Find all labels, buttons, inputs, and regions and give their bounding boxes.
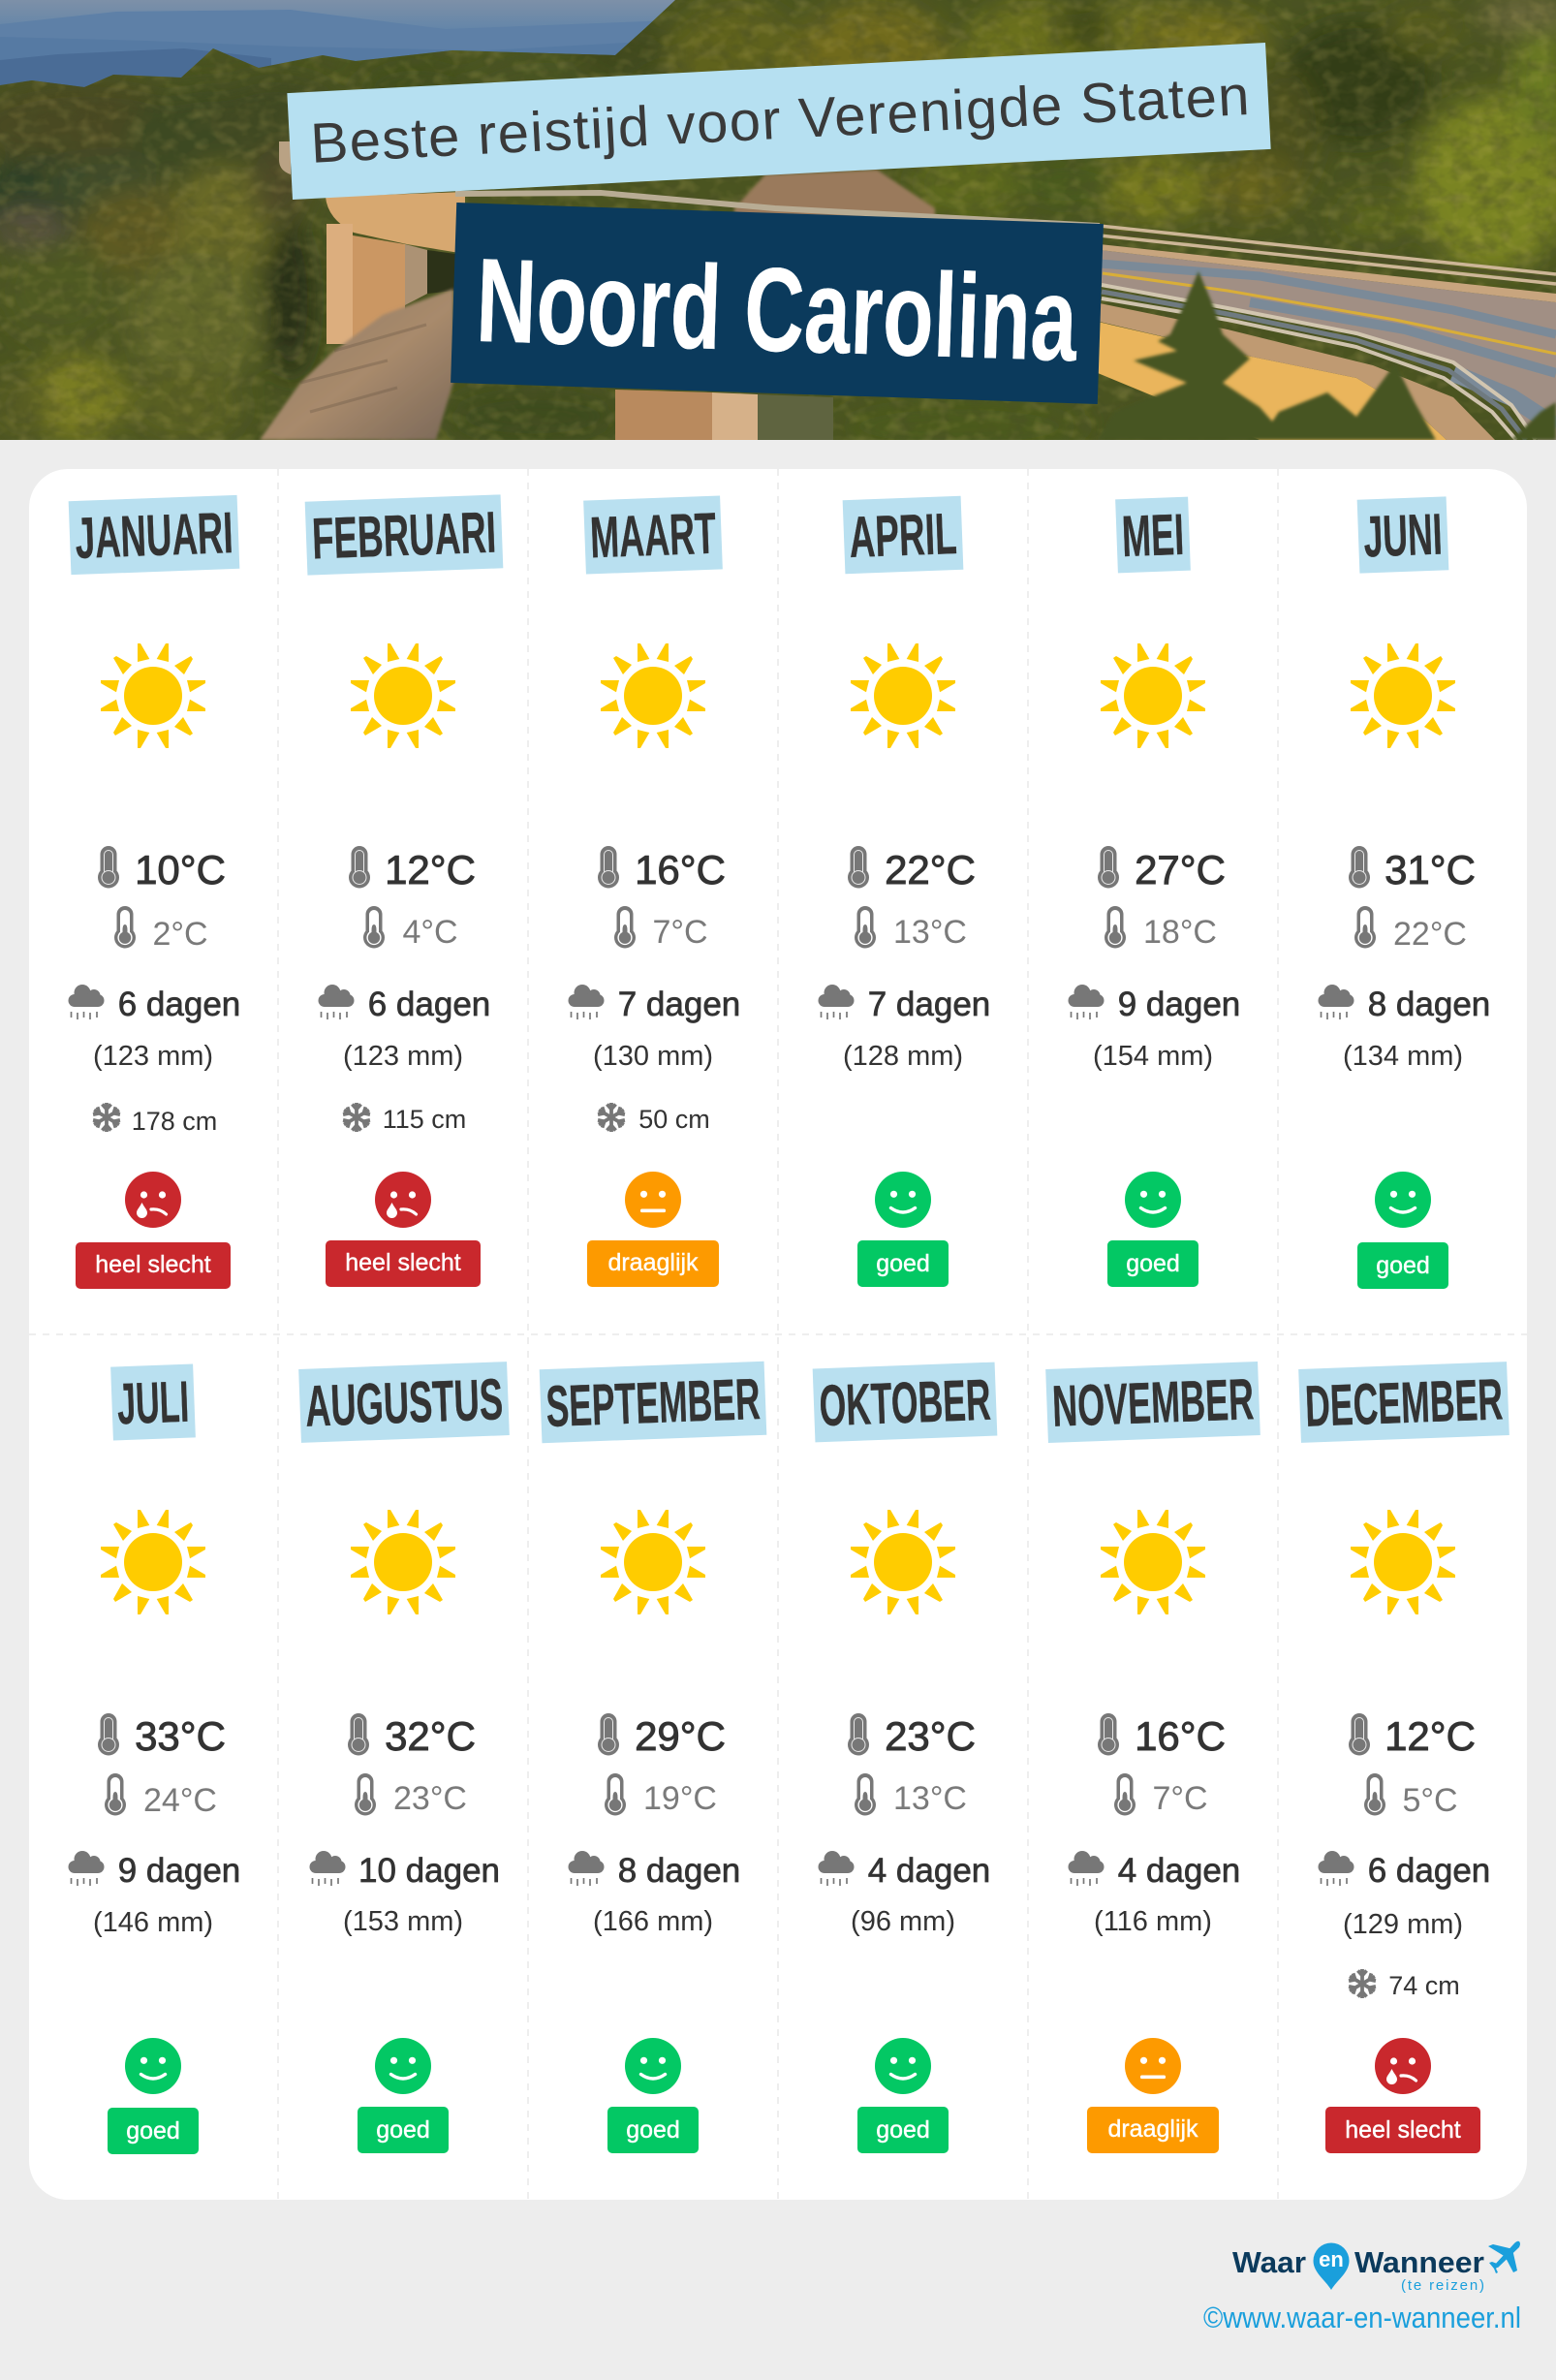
smiley <box>625 1172 681 1228</box>
rain days <box>568 1851 740 1890</box>
low temperature: 7°C <box>652 914 708 951</box>
low temperature <box>855 906 967 951</box>
smiley <box>875 2038 931 2094</box>
low temperature: 19°C <box>643 1780 717 1817</box>
rating badge <box>358 2107 449 2153</box>
low temperature <box>1105 906 1217 951</box>
low temperature: 24°C <box>143 1782 217 1819</box>
high temperature <box>598 846 726 892</box>
rating badge: draaglijk <box>1107 2115 1198 2143</box>
logo: Waar en Wanneer: Waar <box>1232 2245 1306 2279</box>
low temperature <box>1114 1773 1208 1817</box>
smiley <box>1125 2038 1181 2094</box>
high temperature: 32°C <box>385 1713 476 1759</box>
month label <box>540 1362 766 1443</box>
low temperature: 5°C <box>1402 1782 1458 1819</box>
center rock <box>732 170 937 217</box>
icon: sun <box>1101 643 1205 748</box>
icon: map pin <box>1314 2242 1349 2290</box>
rain days: 4 dagen <box>868 1852 990 1890</box>
high temperature: 12°C <box>385 847 476 892</box>
low temperature <box>605 1773 717 1817</box>
month: december <box>1298 1362 1509 2153</box>
rating badge <box>857 1240 949 1287</box>
smiley <box>625 2038 681 2094</box>
railing behind the title <box>455 193 1100 226</box>
low temperature: 7°C <box>1152 1780 1208 1817</box>
foliage texture <box>0 0 1556 440</box>
month: oktober <box>813 1362 997 2153</box>
month label <box>69 495 239 575</box>
low temperature: 18°C <box>1143 914 1217 951</box>
title banner: Noord Carolina <box>451 203 1104 404</box>
rain days: 6 dagen <box>118 986 240 1023</box>
month label: OKTOBER <box>818 1367 992 1438</box>
snowfall <box>342 1103 466 1134</box>
rain days <box>68 1851 240 1890</box>
rainfall: (123 mm) <box>93 1041 213 1072</box>
rain days <box>1068 1851 1240 1890</box>
rain days: 8 dagen <box>618 1852 740 1890</box>
month label <box>298 1362 510 1443</box>
high temperature: 27°C <box>1135 847 1226 892</box>
rainfall: (146 mm) <box>93 1907 213 1938</box>
month label <box>583 495 723 575</box>
website url: ©www.waar-en-wanneer.nl <box>1203 2301 1521 2334</box>
rating badge: goed <box>876 1250 930 1277</box>
rainfall: (153 mm) <box>343 1906 463 1937</box>
low temperature <box>855 1773 967 1817</box>
rain days <box>1318 985 1490 1023</box>
icon: sun <box>351 1510 455 1614</box>
forest <box>0 0 1556 455</box>
rain days <box>318 985 490 1023</box>
rating badge: heel slecht <box>345 1249 461 1276</box>
top curb and rails <box>1100 244 1556 302</box>
rain days <box>568 985 740 1023</box>
rain days: 7 dagen <box>618 986 740 1023</box>
rating badge <box>1325 2107 1480 2153</box>
low temperature <box>1354 906 1467 953</box>
high temperature: 22°C <box>885 847 976 892</box>
rainfall: (123 mm) <box>343 1041 463 1072</box>
rating badge <box>76 1242 231 1289</box>
icon: sun <box>851 643 955 748</box>
smiley <box>875 1172 931 1228</box>
rating badge: goed <box>376 2116 430 2144</box>
month label: NOVEMBER <box>1051 1366 1255 1439</box>
low temperature: 13°C <box>893 914 967 951</box>
low temperature: 2°C <box>152 916 208 953</box>
rainfall: (134 mm) <box>1343 1041 1463 1072</box>
month label <box>1045 1362 1260 1443</box>
rain days <box>1068 985 1240 1023</box>
month label <box>305 494 503 576</box>
rating badge: heel slecht <box>95 1251 211 1278</box>
high temperature: 16°C <box>635 847 726 892</box>
month label: APRIL <box>848 501 958 570</box>
icon: sun <box>601 1510 705 1614</box>
rainfall: (154 mm) <box>1093 1041 1213 1072</box>
month: mei <box>1068 497 1240 1287</box>
icon: sun <box>101 1510 205 1614</box>
heading banner: Beste reistijd voor Verenigde Staten <box>287 43 1271 200</box>
snowfall: 50 cm <box>638 1105 710 1134</box>
rain days <box>818 1851 990 1890</box>
month label <box>1115 497 1191 573</box>
rainfall: (129 mm) <box>1343 1909 1463 1940</box>
panel: monthly climate card <box>29 469 1527 2200</box>
month: februari <box>305 494 503 1287</box>
low temperature <box>614 906 708 951</box>
high temperature: 12°C <box>1385 1713 1476 1759</box>
sky and mountains <box>0 0 675 87</box>
month: september <box>540 1362 766 2153</box>
smiley <box>375 1172 431 1228</box>
smiley <box>125 2038 181 2094</box>
soffit <box>1098 322 1447 440</box>
month label: SEPTEMBER <box>545 1366 762 1439</box>
bridge platform end <box>279 141 291 174</box>
smiley <box>1125 1172 1181 1228</box>
rating badge <box>587 1240 719 1287</box>
month label: FEBRUARI <box>311 500 497 571</box>
rating badge <box>1107 1240 1198 1287</box>
icon: sun <box>1101 1510 1205 1614</box>
smiley <box>375 2038 431 2094</box>
rain days: 6 dagen <box>1368 1852 1490 1890</box>
icon: sun <box>351 643 455 748</box>
snowfall <box>597 1103 710 1134</box>
logo: Waar en Wanneer: (te reizen) <box>1401 2277 1484 2294</box>
month label: AUGUSTUS <box>304 1366 504 1439</box>
heading banner: Beste reistijd voor Verenigde Staten: Beste reistijd voor Verenigde Staten <box>309 64 1251 175</box>
month label <box>1357 496 1448 574</box>
rain days: 9 dagen <box>1118 986 1240 1023</box>
month label: MAART <box>589 501 717 570</box>
rain days <box>68 985 240 1023</box>
logo: Waar en Wanneer: Wanneer <box>1354 2245 1484 2279</box>
month label: JULI <box>116 1369 190 1436</box>
low temperature: 22°C <box>1393 916 1467 953</box>
high temperature <box>98 846 226 892</box>
icon: sun <box>1351 643 1455 748</box>
rain days: 9 dagen <box>118 1852 240 1890</box>
month: april <box>818 496 990 1287</box>
high temperature <box>1098 846 1226 892</box>
low temperature <box>363 906 458 951</box>
rating badge: goed <box>1126 1250 1180 1277</box>
rainfall: (166 mm) <box>593 1906 713 1937</box>
road and wall on the right <box>1098 226 1556 440</box>
month label: JUNI <box>1362 502 1444 569</box>
low temperature: 4°C <box>402 914 458 951</box>
icon: sun <box>1351 1510 1455 1614</box>
high temperature: 29°C <box>635 1713 726 1759</box>
low temperature <box>355 1773 467 1817</box>
month label: MEI <box>1121 502 1185 569</box>
rating badge <box>108 2108 199 2154</box>
month: maart <box>568 495 740 1287</box>
month: november <box>1045 1362 1260 2153</box>
icon: sun <box>101 643 205 748</box>
rating badge: heel slecht <box>1345 2116 1461 2144</box>
month: juli <box>68 1363 240 2154</box>
snowfall <box>92 1103 217 1136</box>
rain days <box>1318 1851 1490 1890</box>
rain days: 8 dagen <box>1368 986 1490 1023</box>
smiley <box>125 1172 181 1228</box>
rainfall: (130 mm) <box>593 1041 713 1072</box>
low temperature <box>114 906 208 953</box>
rating badge: goed <box>876 2116 930 2144</box>
rating badge <box>857 2107 949 2153</box>
header photo: mountain road bridge <box>0 0 1556 455</box>
month label <box>843 496 963 574</box>
rating badge <box>1357 1242 1448 1289</box>
rating badge: draaglijk <box>607 1249 699 1276</box>
bridge deck and pillars <box>326 192 833 440</box>
rating badge: goed <box>626 2116 680 2144</box>
icon: sun <box>851 1510 955 1614</box>
high temperature: 10°C <box>135 847 226 892</box>
pine trees and bushes over the bridge <box>1098 271 1556 440</box>
rating badge <box>607 2107 699 2153</box>
rain days: 4 dagen <box>1118 1852 1240 1890</box>
high temperature: 23°C <box>885 1713 976 1759</box>
high temperature: 31°C <box>1385 847 1476 892</box>
rating badge <box>1087 2107 1219 2153</box>
rainfall: (116 mm) <box>1094 1906 1212 1937</box>
month label <box>813 1362 997 1442</box>
lower rails <box>1102 285 1536 440</box>
snowfall: 74 cm <box>1388 1971 1460 2000</box>
month label <box>110 1363 196 1441</box>
icon: sun <box>601 643 705 748</box>
rain days: 6 dagen <box>368 986 490 1023</box>
title banner: Noord Carolina: Noord Carolina <box>475 235 1080 387</box>
rock left <box>260 289 453 440</box>
month: juni <box>1318 496 1490 1289</box>
rainfall: (128 mm) <box>843 1041 963 1072</box>
rainfall: (96 mm) <box>851 1906 955 1937</box>
concrete wall <box>1100 303 1495 440</box>
rain days: 7 dagen <box>868 986 990 1023</box>
snowfall <box>1348 1969 1460 2000</box>
rating badge: goed <box>126 2117 180 2145</box>
icon: airplane <box>1488 2241 1520 2273</box>
logo: Waar en Wanneer <box>1232 2241 1520 2294</box>
icon: map pin: en <box>1319 2247 1344 2271</box>
smiley <box>1375 1172 1431 1228</box>
high temperature <box>848 846 976 892</box>
smiley <box>1375 2038 1431 2094</box>
rain days: 10 dagen <box>358 1852 500 1890</box>
high temperature: 33°C <box>135 1713 226 1759</box>
rating badge <box>326 1240 481 1287</box>
low temperature: 23°C <box>393 1780 467 1817</box>
rain days <box>818 985 990 1023</box>
month label: JANUARI <box>74 500 234 571</box>
month: augustus <box>298 1362 510 2153</box>
road surface <box>1100 250 1556 440</box>
rating badge: goed <box>1376 1252 1430 1279</box>
high temperature: 16°C <box>1135 1713 1226 1759</box>
month: januari <box>68 495 240 1289</box>
snowfall: 178 cm <box>132 1107 217 1136</box>
low temperature <box>1364 1773 1458 1819</box>
snowfall: 115 cm <box>383 1105 466 1134</box>
low temperature <box>105 1773 217 1819</box>
low temperature: 13°C <box>893 1780 967 1817</box>
